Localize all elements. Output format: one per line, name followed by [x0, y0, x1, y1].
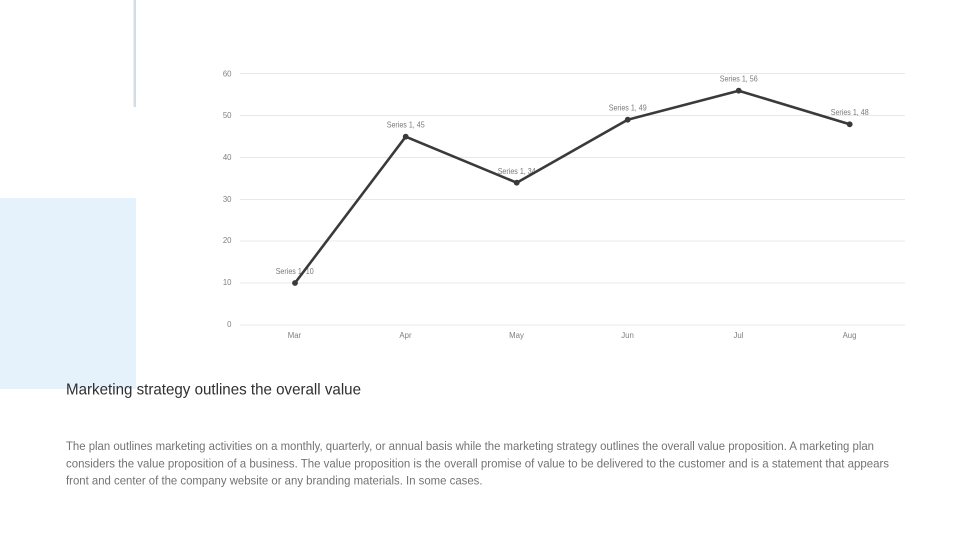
heading: Marketing strategy outlines the overall value: [66, 382, 361, 398]
body text: front and center of the company website or any branding materials. In some cases.: [66, 474, 482, 488]
decorative light blue block: [0, 198, 136, 389]
x axis labels: Aug: [843, 331, 856, 340]
x axis labels: Jul: [734, 331, 744, 340]
y axis labels: 10: [223, 278, 232, 287]
body text: considers the value proposition of a business. The value proposition is the overall promise of value to be delivered to the customer and is a statement that appears: [66, 456, 889, 470]
x axis labels: Apr: [399, 331, 412, 340]
data labels: Series 1, 45: [387, 120, 425, 130]
x axis labels: May: [509, 331, 524, 340]
data labels: Series 1, 34: [498, 167, 536, 176]
y axis labels: 60: [223, 70, 232, 78]
y axis labels: 20: [223, 236, 232, 245]
body text: The plan outlines marketing activities on a monthly, quarterly, or annual basis while the marketing strategy outlines the overall value proposition. A marketing plan: [66, 439, 874, 453]
body text: [66, 439, 889, 488]
data labels: Series 1, 48: [831, 108, 869, 117]
data line: [295, 91, 850, 283]
y axis labels: [223, 70, 232, 329]
y axis labels: 30: [223, 195, 232, 204]
x axis labels: Mar: [288, 331, 302, 340]
y axis labels: 50: [223, 111, 232, 120]
data points: [292, 88, 853, 286]
decorative vertical line: [134, 0, 136, 107]
x axis labels: [288, 331, 856, 340]
line chart: [223, 70, 905, 340]
x axis labels: Jun: [621, 331, 634, 340]
data labels: Series 1, 10: [276, 267, 314, 276]
data labels: Series 1, 49: [609, 104, 647, 112]
y axis labels: 40: [223, 153, 232, 162]
data labels: [276, 74, 869, 276]
data labels: Series 1, 56: [720, 74, 758, 84]
y axis labels: 0: [227, 320, 232, 329]
